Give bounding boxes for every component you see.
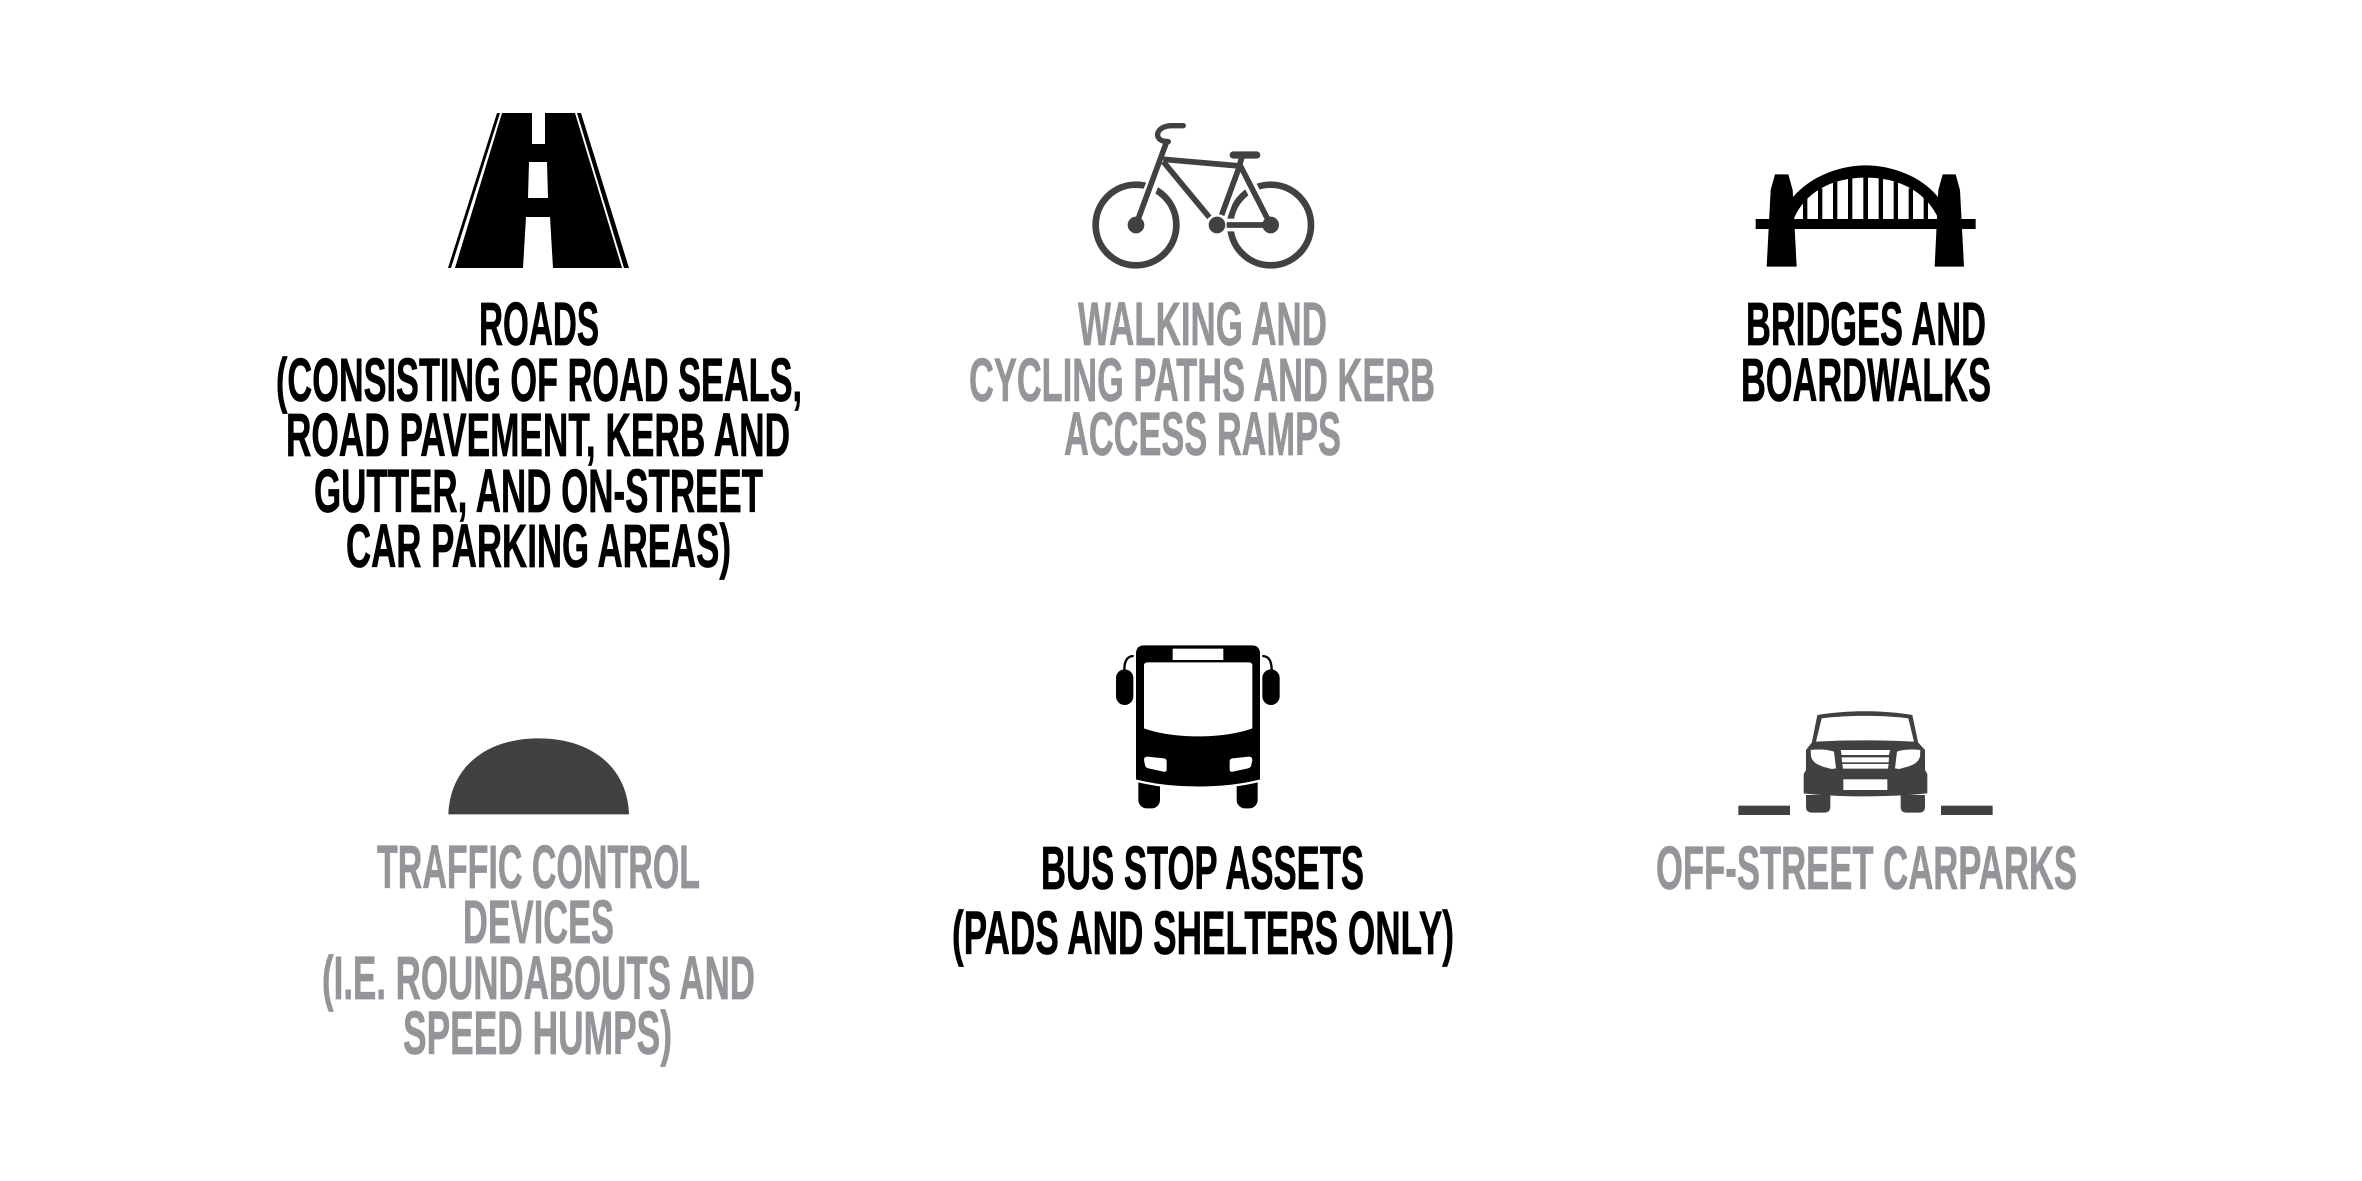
icon: speed hump [448, 738, 629, 814]
text: walking and cycling label: ACCESS RAMPS [1064, 400, 1341, 468]
text: walking and cycling label [969, 290, 1435, 468]
text: bridges label: BRIDGES AND [1746, 290, 1986, 358]
panel: walking and cycling [969, 126, 1435, 468]
text: walking and cycling label: WALKING AND [1078, 290, 1327, 358]
text: traffic control label: (I.E. ROUNDABOUTS AND [322, 944, 755, 1012]
text: bus stop label [952, 834, 1454, 967]
text: roads label: CAR PARKING AREAS) [346, 512, 731, 580]
icon: car [1738, 711, 1993, 815]
panel: bridges and boardwalks [1741, 165, 1991, 414]
panel: roads [276, 113, 802, 580]
text: roads label [276, 290, 802, 580]
text: walking and cycling label: CYCLING PATHS AND KERB [969, 346, 1435, 414]
icon: bridge [1756, 165, 1976, 267]
panel: bus stop assets [952, 645, 1454, 967]
icon: bicycle [1096, 126, 1311, 265]
panel: off-street carparks [1656, 711, 2077, 902]
text: roads label: ROAD PAVEMENT, KERB AND [286, 401, 790, 469]
text: bus stop label: BUS STOP ASSETS [1041, 834, 1364, 902]
text: bridges label [1741, 290, 1991, 414]
text: traffic control label: DEVICES [463, 888, 614, 956]
text: traffic control label [322, 833, 755, 1067]
icon: road [448, 113, 629, 268]
text: bridges label: BOARDWALKS [1741, 346, 1991, 414]
text: traffic control label: TRAFFIC CONTROL [377, 833, 700, 901]
panel: traffic control devices [322, 738, 755, 1067]
text: traffic control label: SPEED HUMPS) [403, 999, 672, 1067]
text: roads label: (CONSISTING OF ROAD SEALS, [276, 346, 802, 414]
icon: bus [1116, 645, 1280, 808]
text: roads label: ROADS [479, 290, 599, 358]
text: roads label: GUTTER, AND ON-STREET [314, 457, 763, 525]
text: bus stop label: (PADS AND SHELTERS ONLY) [952, 899, 1454, 967]
